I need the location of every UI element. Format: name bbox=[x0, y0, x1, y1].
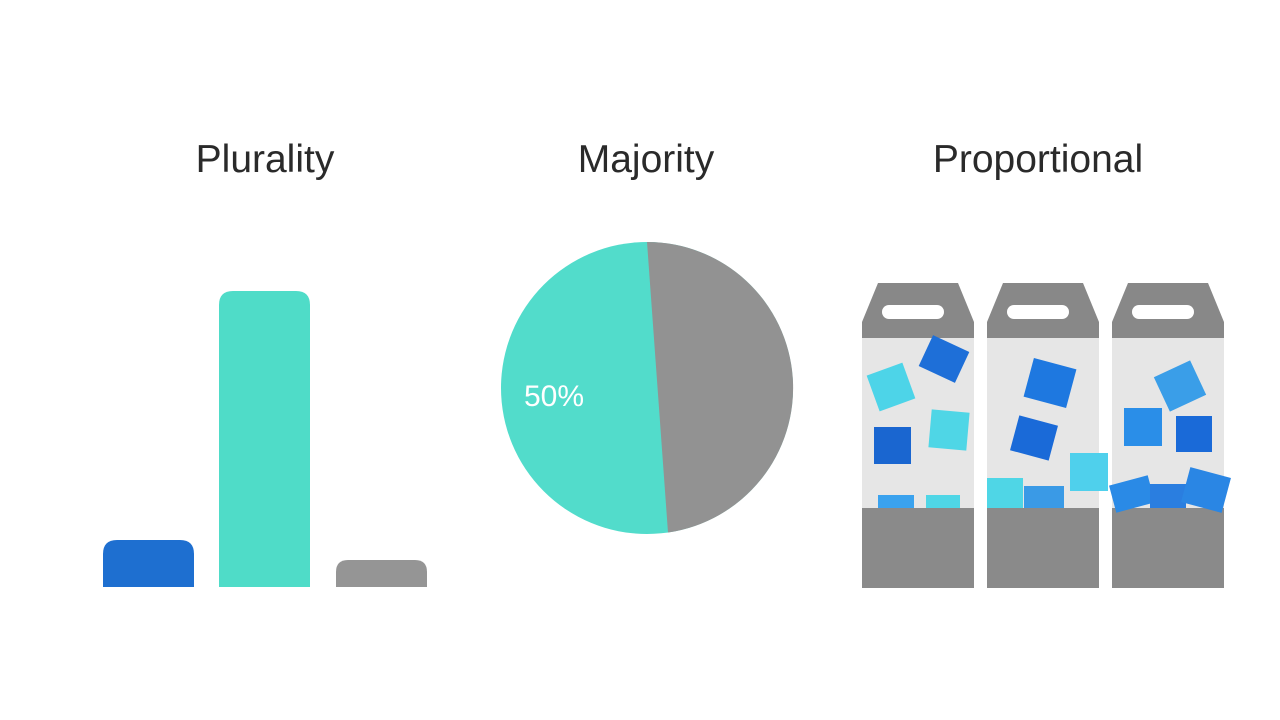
bar chart bbox=[103, 291, 427, 587]
ballot boxes bbox=[862, 283, 1231, 588]
pie chart bbox=[501, 242, 793, 534]
box 3 bbox=[1109, 283, 1231, 588]
box 1 bbox=[862, 283, 974, 588]
box 2 bbox=[987, 283, 1108, 588]
label: 50%: 50% bbox=[524, 380, 584, 413]
title: Majority: Majority bbox=[578, 138, 714, 181]
title: Plurality: Plurality bbox=[196, 138, 334, 181]
title: Proportional: Proportional bbox=[933, 138, 1143, 181]
